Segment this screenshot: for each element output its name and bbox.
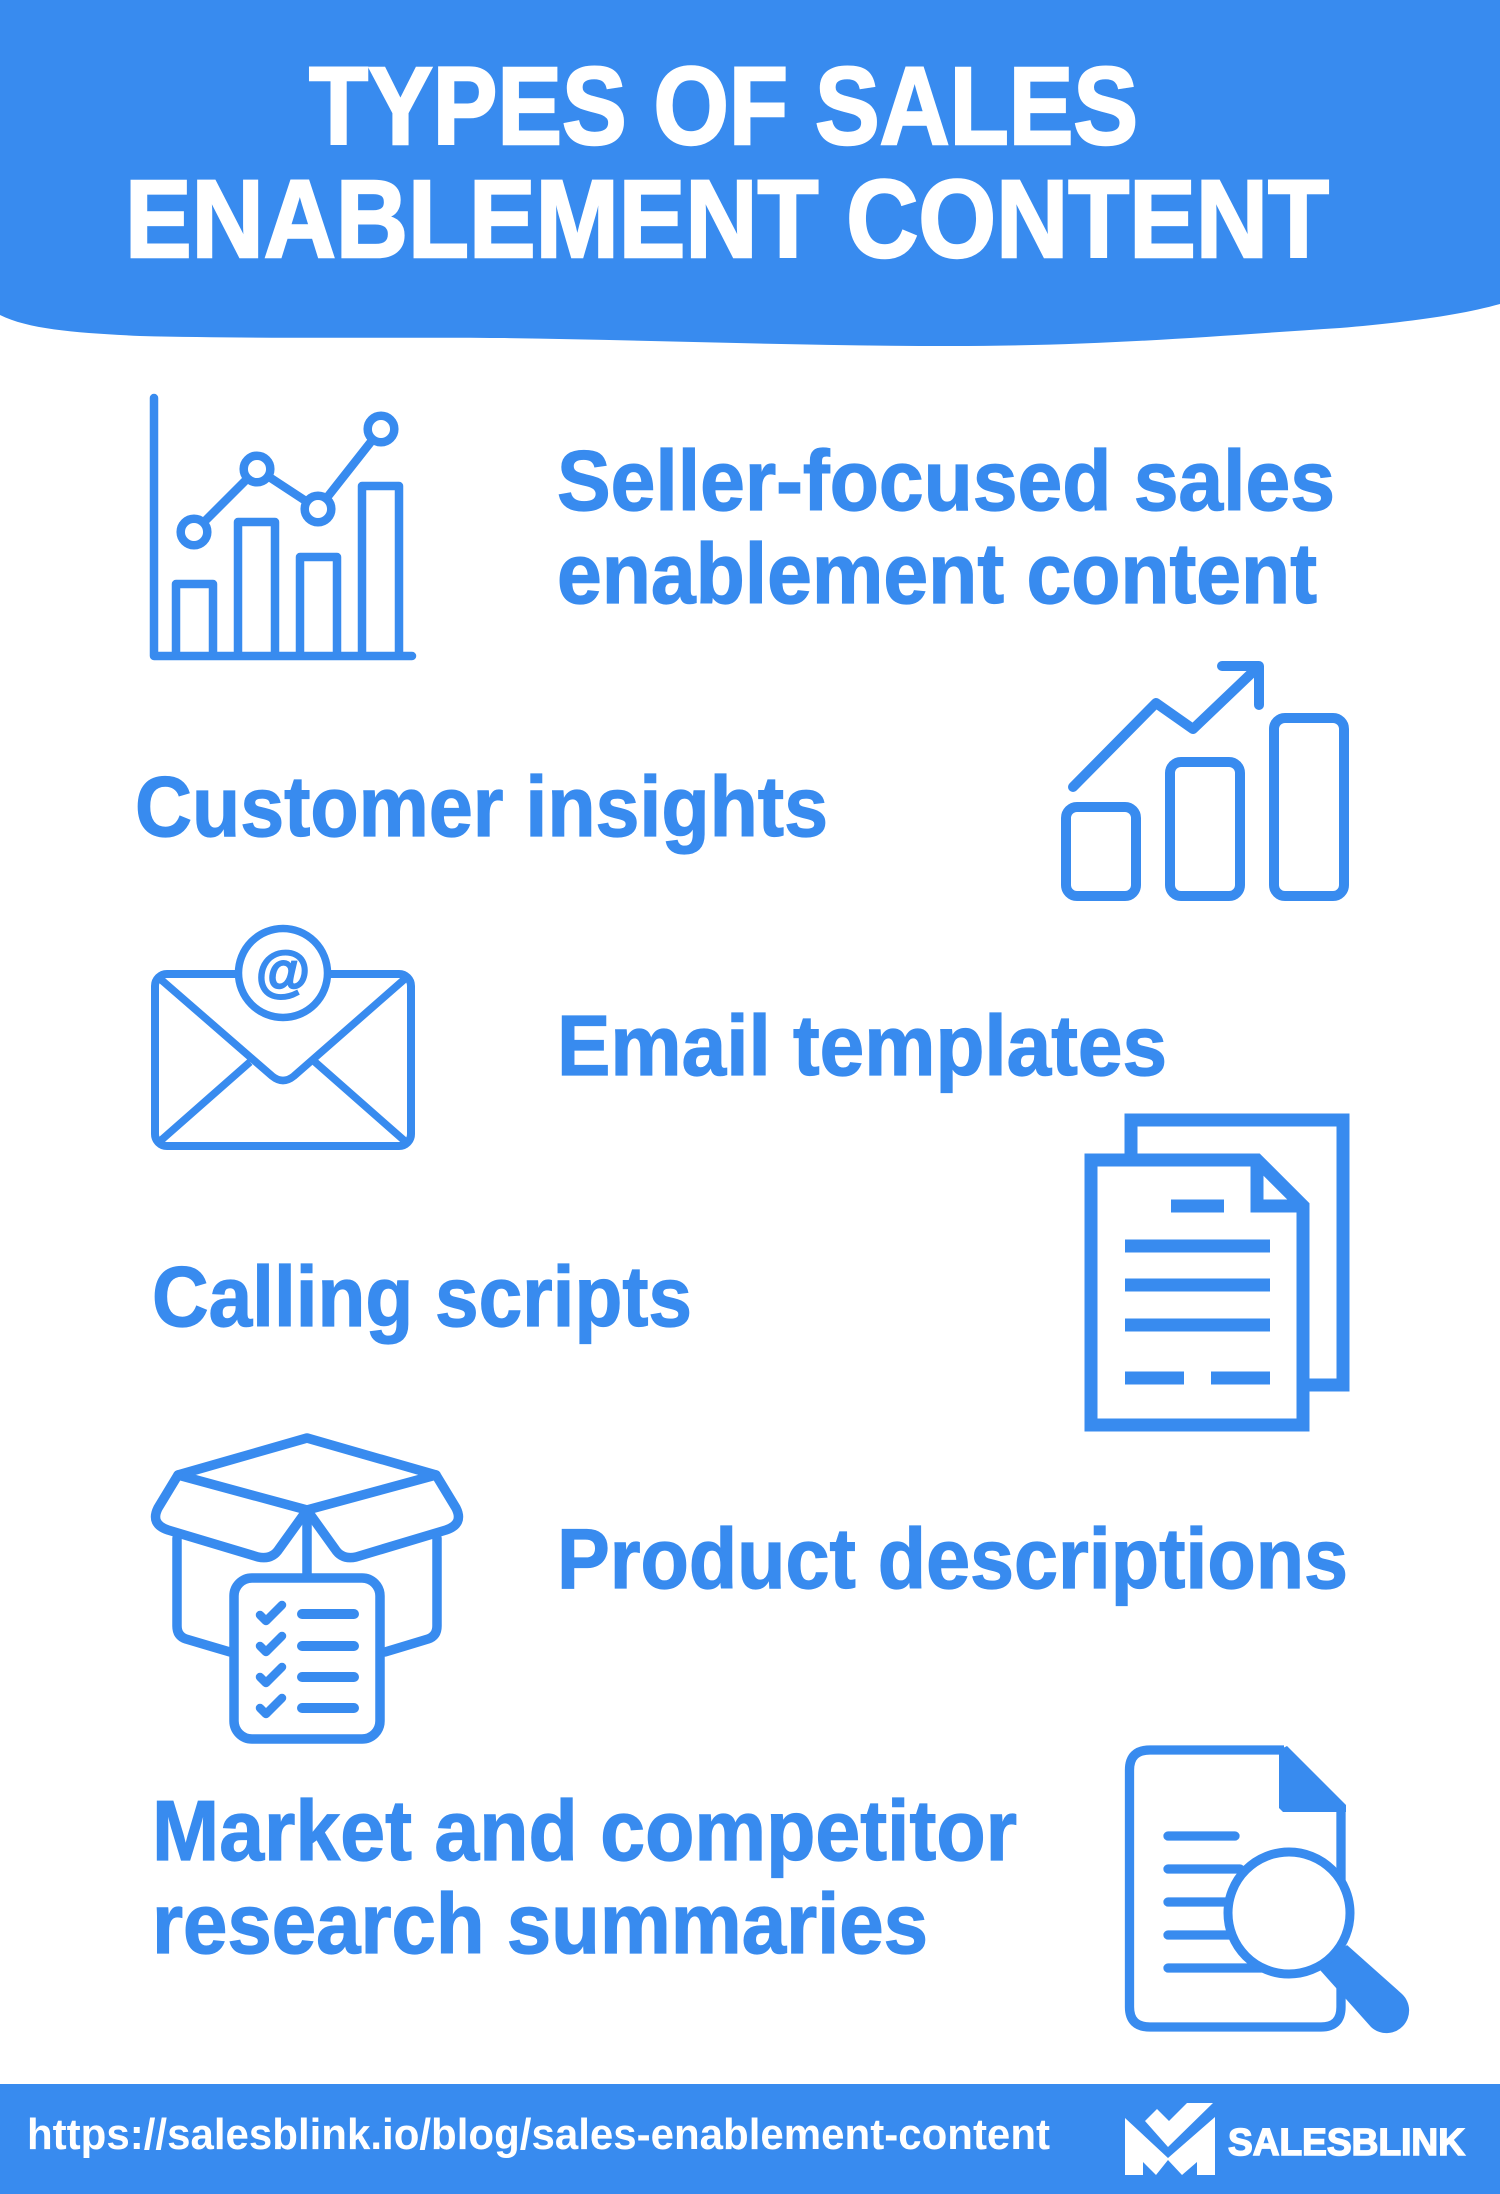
- title: TYPES OF SALES: [309, 45, 1138, 168]
- text: seller-focused: Seller-focused sales: [557, 434, 1335, 529]
- title: [125, 45, 1329, 281]
- text: market and competitor: Market and competitor: [152, 1784, 1017, 1879]
- title: ENABLEMENT CONTENT: [125, 158, 1329, 281]
- icon: bar chart with line: [154, 398, 412, 656]
- text: customer insights: Customer insights: [135, 760, 828, 855]
- text: market and competitor: [152, 1784, 1017, 1972]
- logo: SalesBlink: SALESBLINK: [1228, 2122, 1466, 2164]
- text: email templates: Email templates: [557, 999, 1167, 1094]
- text: calling scripts: Calling scripts: [152, 1250, 692, 1345]
- text: seller-focused: [557, 434, 1335, 622]
- footer url: https://salesblink.io/blog/sales-enablement-content: [27, 2110, 1050, 2159]
- icon: document with magnifier: [1130, 1746, 1409, 2033]
- footer bar: [0, 2084, 1500, 2194]
- icon: stacked documents: [1091, 1120, 1343, 1425]
- icon: email envelope: [155, 928, 411, 1146]
- text: market and competitor: research summaries: [152, 1877, 928, 1972]
- text: seller-focused: enablement content: [557, 527, 1317, 622]
- icon: email envelope: @: [256, 939, 310, 1002]
- icon: growth bars with arrow: [1066, 666, 1344, 896]
- icon: open box with checklist: [156, 1438, 458, 1739]
- header banner: [0, 0, 1500, 346]
- text: product descriptions: Product descriptions: [557, 1512, 1348, 1607]
- logo: SalesBlink: [1125, 2103, 1466, 2175]
